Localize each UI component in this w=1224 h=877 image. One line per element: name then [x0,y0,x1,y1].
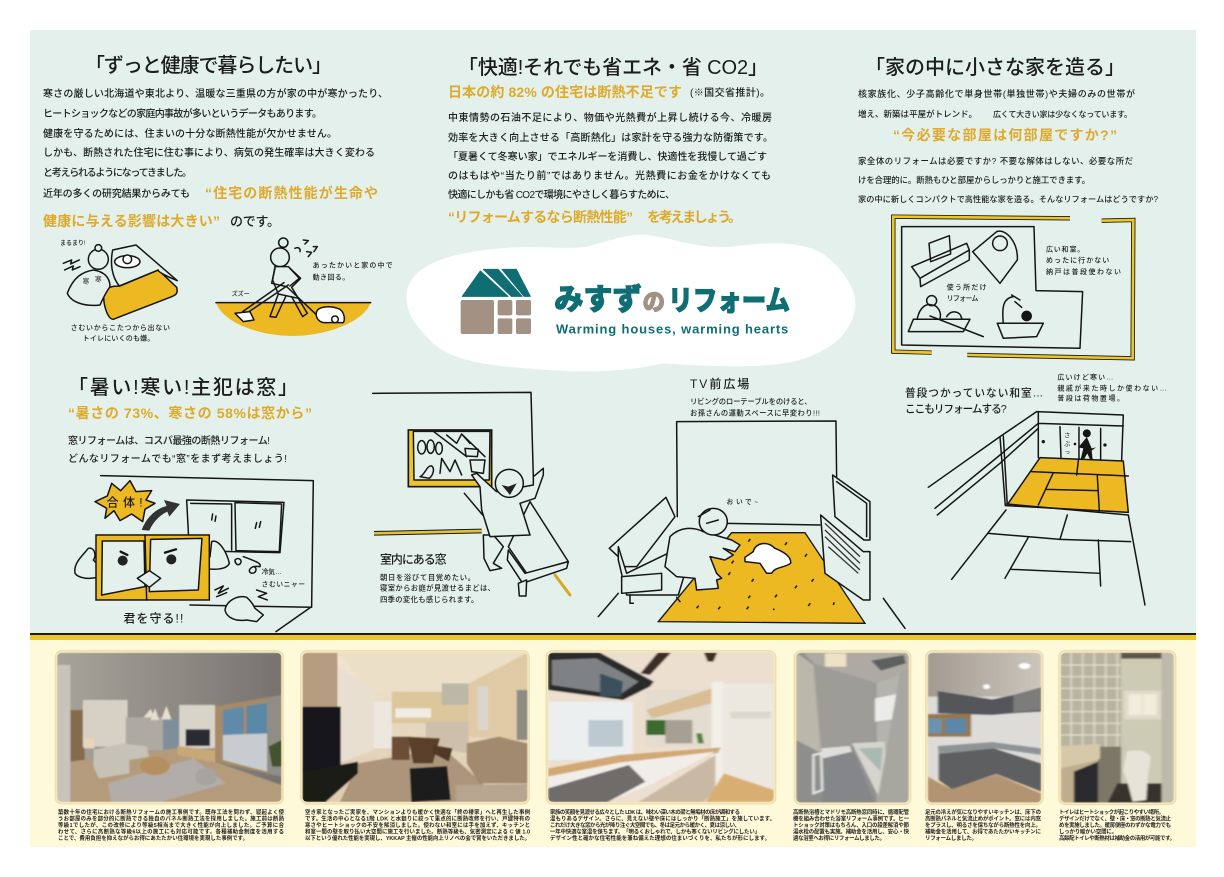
text block: health body: ヒートショックなどの家庭内事故が多いというデータもあります。 [43,107,322,120]
illustration: window combine: さむいニャー [262,581,305,589]
source note: (※国交省推計)。 [690,86,770,99]
caption: bathroom: 機を組み合わせた浴室リフォーム事例です。ヒー [793,814,909,822]
callout: window loss figures: “暑さの 73%、寒さの 58%は窓から” [68,405,312,421]
panel: health section text [43,54,388,229]
illustration: indoor window room: 寝室からお庭が見渡せるまどは、 [380,584,495,593]
text block: proposal: けを合理的に。断熱もひと部屋からしっかりと施工できます。 [858,175,1090,185]
illustration: living room with TV [598,376,870,623]
text block: trend: 増え、新築は平屋がトレンド。 [858,109,977,119]
illustration: floor plan: 広い和室。 [1046,245,1084,254]
caption: toilet: しっかり暖かい空間に。 [1059,828,1117,836]
caption: bright LDK [550,808,775,842]
illustration: window combine: 合体! [107,495,143,510]
caption: bathroom: 適な浴室へお得にリフォームしました。 [793,834,885,842]
text block: trend: 広くて大きい家は少なくなっています。 [993,109,1132,119]
illustration: living room with TV: リビングのローテーブルをのけると、 [690,397,812,406]
caption: bathroom: 高断熱浴槽とマドリモ高断熱窓同時に、循環配管 [793,808,910,816]
caption: kitchen [925,808,1042,842]
caption: kitchen: 足元の冷えが気になりやすいキッチンは、床下の [925,808,1041,816]
caption: toilet: トイレはヒートショックが起こりやすい場所。 [1059,808,1164,816]
illustration: unused tatami room: ここもリフォームする? [905,404,1007,416]
logo wordmark: リフォーム [668,285,790,316]
caption: vacant house renovation: 空き家となったご実家を、マンションよりも暖かく快適な「終の棲家」へと再生した事例 [305,808,531,816]
illustration: kotatsu: 寒 [95,275,102,284]
text block: comfort body: のはもはや“当たり前”ではありません。光熱費にお金をかけなくても [448,169,771,182]
photo: toilet room [1059,651,1176,805]
divider band [30,633,1196,640]
illustration: unused tatami room: ぶ [1064,440,1071,448]
caption: bathroom: 湯水栓の配置も実施。補助金を活用し、安心・快 [793,828,910,836]
illustration: unused tatami room: 普段つかっていない和室… [905,387,1043,400]
text block: health body [43,87,388,200]
caption: bright LDK: 家族の笑顔を見渡せる広々とした LDK は、味わい深い木の梁と無垢材の床が調和する [550,808,740,816]
caption: whole-house insulation: うお部屋のみを部分的に断熱できる独自のパネル断熱工法を採用しました。施工前は断熱 [58,814,285,822]
illustration: vacuuming woman: ズズー [232,290,250,298]
caption: toilet: 高齢配トイレや断熱材は補助金の活用が可能です。 [1059,834,1175,842]
photo: kitchen with hood [546,651,776,804]
heading: windows: 「暑い!寒い!主犯は窓」 [68,376,298,399]
callout: insulation first [448,209,742,225]
caption: whole-house insulation: ことで、費用負担を抑えながらお得にあたたかい住環境を実現した事例です。 [58,834,248,842]
caption: vacant house renovation: 寒さやヒートショックの不安を解消しました。使わない和室には手を加えず、キッチンと [305,821,530,829]
caption: bathroom: トショック対策はもちろん、入口の段差解消や節 [793,821,910,829]
logo wordmark: みすず [554,283,642,316]
illustration: floor plan: 使う所だけ [947,282,987,291]
illustration: vacuuming woman: 動き回る。 [313,272,349,281]
illustration: floor plan: リフォーム [947,295,978,303]
photo: bathroom [794,651,911,805]
illustration: unused tatami room: さ [1064,431,1070,439]
photo strip [55,651,1176,805]
photo: open plan dining [301,651,529,804]
illustration: window combine: 冷気… [262,567,282,576]
callout: insulation shortfall: 日本の約 82% の住宅は断熱不足です [448,84,682,100]
logo tagline: Warming houses, warming hearts [556,322,788,337]
illustration: unused tatami room: 親戚が来た時しか使わない… [1057,383,1167,392]
text block: windows body: 窓リフォームは、コスパ最強の断熱リフォーム! [68,434,270,447]
illustration: window combine: 君を守る!! [123,612,183,626]
text block: windows body: どんなリフォームでも“窓”をまず考えましょう! [68,452,287,465]
callout: rooms question: “今必要な部屋は何部屋ですか?” [893,127,1117,143]
illustration: floor plan [893,217,1133,358]
caption: vacant house renovation: 以下という優れた性能を実現し、YKKAP 主催の性能向上リノベの会で賞をいただきました。 [305,834,530,842]
caption: kitchen: リフォームしました。 [925,834,977,842]
caption: kitchen: 補助金を活用して、お得であたたかいキッチンに [925,828,1041,836]
illustration: unused tatami room: 広いけど寒い… [1057,372,1113,381]
panel: small house section text [858,56,1158,204]
illustration: kotatsu: さむいからこたつから出ない [71,323,170,332]
illustration: living room with TV: お孫さんの運動スペースに早変わり!!! [690,408,820,417]
callout: health highlight: 健康に与える影響は大きい” [43,213,220,229]
illustration: indoor window room: 室内にある窓 [380,551,447,566]
caption: whole-house insulation: わせて、さらに高断熱な等級6以上の施工にも対応可能です。各種補助金制度を活用する [58,828,284,836]
illustration: floor plan: 納戸は普段使わない [1046,267,1121,276]
panel: cream photo strip [30,640,1196,847]
illustration: floor plan: めったに行かない [1046,256,1109,265]
heading: small house: 「家の中に小さな家を造る」 [865,56,1125,79]
heading: health: 「ずっと健康で暮らしたい」 [85,54,332,77]
text block: health body: 寒さの厳しい北海道や東北より、温暖な三重県の方が家の中が寒かったり、 [43,87,388,100]
caption: toilet: デザインだけでなく、壁・床・窓の断熱と気流止 [1059,814,1172,822]
illustration: window combine [75,476,313,632]
text block: comfort body: 快適にしかも省 CO2で環境にやさしく暮らすために、 [448,188,675,201]
callout: health highlight: のです。 [230,214,280,229]
text block: comfort body [448,111,773,201]
text block: proposal [858,156,1158,204]
caption: bright LDK: デザイン性と確かな住宅性能を兼ね備えた理想の住まいづくりを、私たちが形にします。 [550,834,770,842]
icon: house walls [461,300,531,334]
caption: kitchen: 高断熱パネルと気流止めがポイント。窓には内窓 [925,814,1042,822]
illustration: vacuuming woman [216,238,393,336]
text block: comfort body: 「夏暑くて冬寒い家」でエネルギーを消費し、快適性を我慢して過ごす [448,150,767,163]
illustration: kotatsu: 寒 [83,276,90,285]
text block: health body: と考えられるようになってきました。 [43,167,192,179]
text block: trend [858,88,1135,119]
callout: health highlight [43,185,378,229]
illustration: unused tatami room [883,372,1167,628]
illustration: unused tatami room: 普段は荷物置場。 [1057,394,1124,403]
illustration: kotatsu: まるまり! [60,240,86,247]
logo blob [407,235,856,371]
text block: health body: 健康を守るためには、住まいの十分な断熱性能が欠かせません。 [43,127,337,140]
text block: health body: 近年の多くの研究結果からみても [43,187,190,200]
callout: insulation first: “リフォームするなら断熱性能” [448,209,633,225]
illustration: vacuuming woman: あったかいと家の中で [313,260,393,269]
caption: vacant house renovation: 和室一間の壁を取り払い大空間に施工を行いました。断熱等級も、気密測定による C 値 1.0 [305,828,530,836]
caption: vacant house renovation: です。生活の中心となる1階 LDK と水廻りに絞って重点的に断熱改修を行い、戸建特有の [305,814,530,822]
text block: health body: しかも、断熱された住宅に住む事により、病気の発生確率は大きく変わる [43,146,375,159]
logo wordmark: の [643,289,665,315]
illustration: indoor window room [373,392,570,604]
caption: whole-house insulation [58,808,285,842]
text block: proposal: 家の中に新しくコンパクトで高性能な家を造る。そんなリフォームはどうですか? [858,194,1158,204]
illustration: indoor window room: 四季の変化も感じられます。 [380,595,478,604]
text block: trend: 核家族化、少子高齢化で単身世帯(単独世帯)や夫婦のみの世帯が [858,88,1135,99]
icon: house roof [462,269,530,296]
panel: comfort section text [448,56,773,225]
caption: whole-house insulation: 築数十年の住宅における断熱リフォームの施工事例です。既存工法を問わず、寝起よく使 [58,808,285,816]
callout: insulation first: を考えましょう。 [647,209,742,225]
illustration: kotatsu [60,240,177,343]
illustration: indoor window room: 朝日を浴びて目覚めたい。 [380,573,475,582]
illustration: living room with TV: TV前広場 [690,376,749,391]
illustration: living room with TV: おいで~ [727,498,758,506]
heading: comfort: 「快適!それでも省エネ・省 CO2」 [458,56,768,79]
panel: mint background [30,30,1196,634]
text block: windows body [68,434,287,465]
caption: bright LDK: 一年中快適な室温を保ちます。「明るくおしゃれで、しかも寒くないリビングにしたい」 [550,828,760,836]
callout: health highlight: “住宅の断熱性能が生命や [205,185,378,201]
illustration: kotatsu: トイレにいくのも嫌。 [83,334,154,343]
caption: toilet [1059,808,1175,842]
caption: vacant house renovation [305,808,531,842]
illustration: unused tatami room: っ [1065,450,1070,456]
logo wordmark [554,283,790,316]
caption: toilet: めを実施しました。暖房便座のわずかな電力でも [1059,821,1171,829]
photo: living room with rug [55,651,283,804]
photo: grey kitchen [926,651,1043,805]
text block: proposal: 家全体のリフォームは必要ですか? 不要な解体はしない、必要な所だ [858,156,1133,166]
caption: bathroom [793,808,910,842]
caption: whole-house insulation: 等級1でしたが、この改修により等級5相当まで大きく性能が向上しました。ご予算に合 [58,821,285,829]
caption: bright LDK: これだけ大きな窓から光が降り注ぐ大空間でも、冬は足元から暖かく、夏は涼しい、 [550,821,740,829]
panel: windows section text [68,376,312,465]
caption: bright LDK: 温もりあるデザイン。さらに、見えない壁や床にはしっかり「断熱施工」を施しています。 [550,814,775,822]
text block: comfort body: 中東情勢の石油不足により、物価や光熱費が上昇し続ける今、冷暖房 [448,111,772,124]
text block: comfort body: 効率を大きく向上させる「高断熱化」は家計を守る強力な防衛策です。 [448,131,773,144]
caption: kitchen: をプラスし、明るさを保ちながら断熱性を向上。 [925,821,1041,829]
